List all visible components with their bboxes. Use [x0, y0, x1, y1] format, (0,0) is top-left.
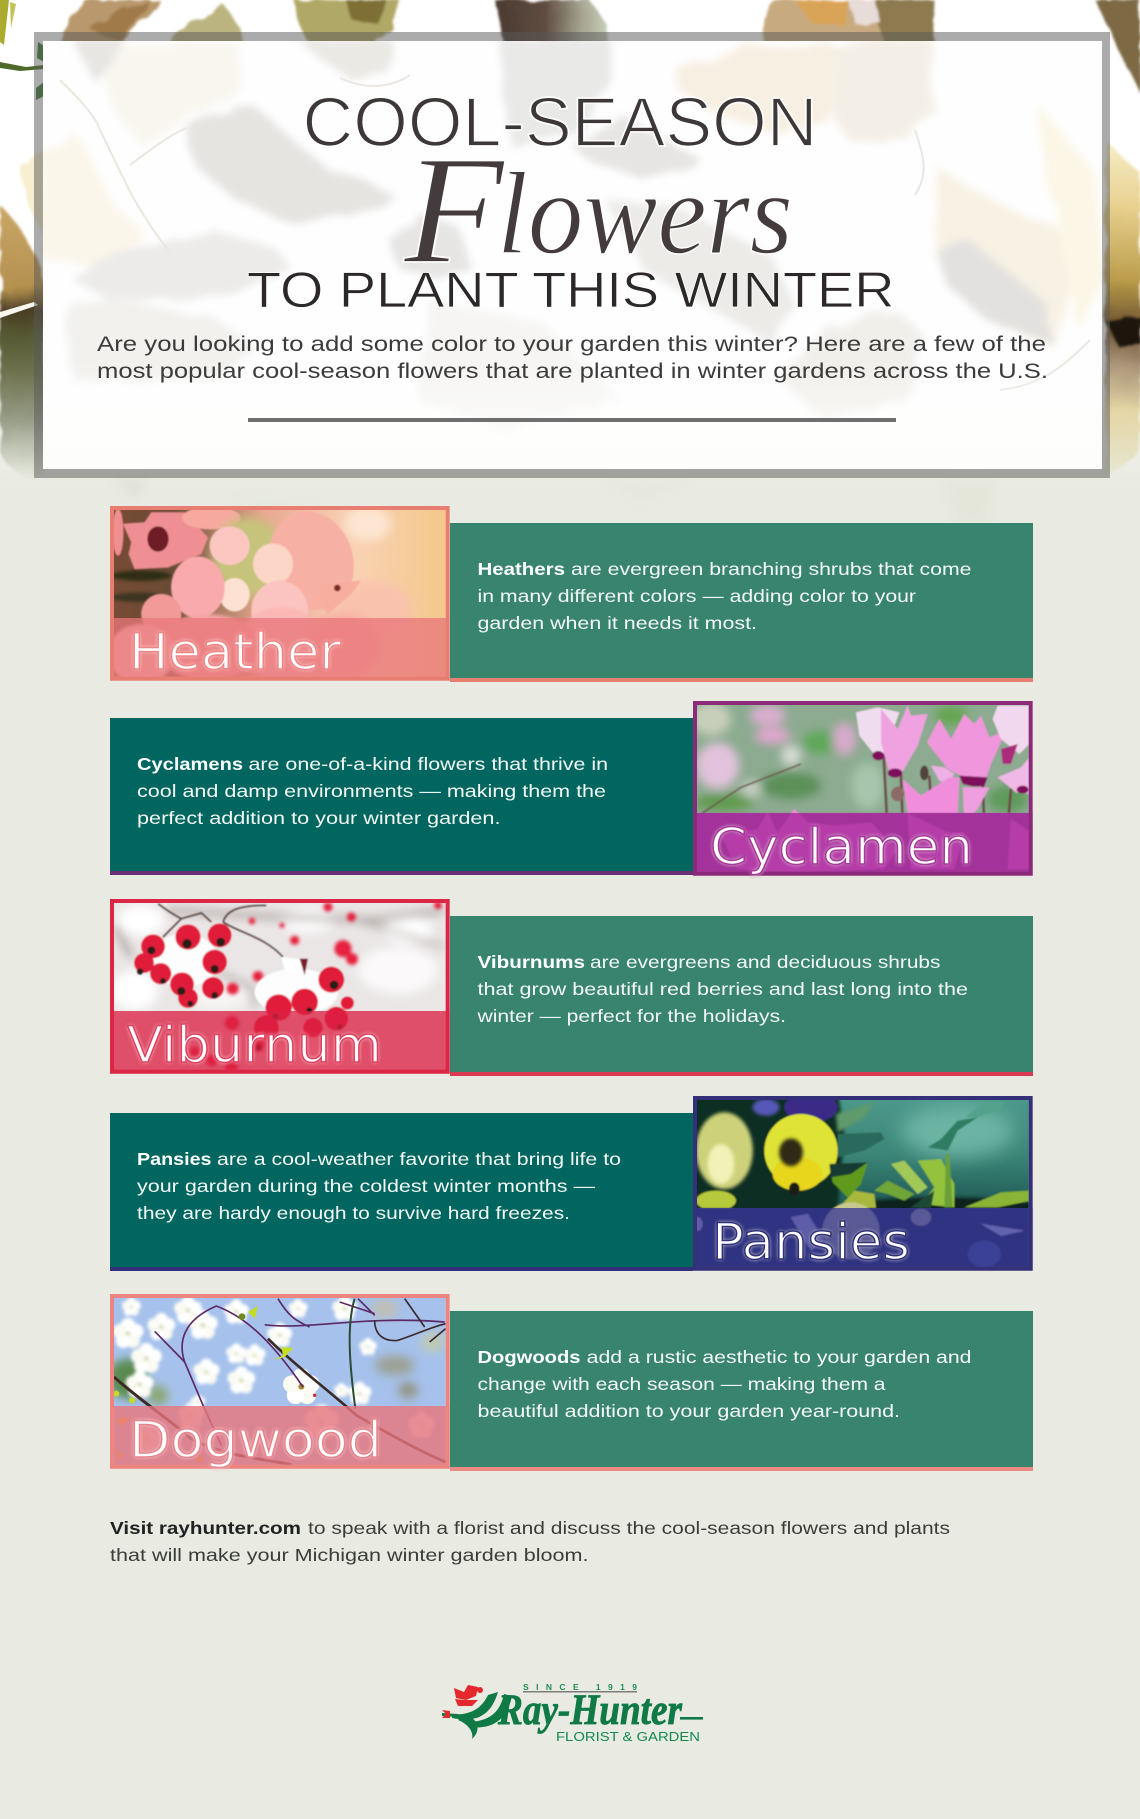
panel: viburnum text: are evergreens and deciduous shrubs — [590, 952, 941, 972]
header frame — [34, 32, 1110, 478]
logo since text: SINCE 1919 — [523, 1682, 637, 1692]
panel: dogwood text — [450, 1311, 1033, 1471]
panel: heather text: garden when it needs it most. — [478, 613, 757, 633]
title: cool-season: COOL-SEASON — [302, 83, 818, 161]
panel bottom fade — [43, 360, 1102, 469]
panel: heather text: are evergreen branching shrubs that come — [571, 559, 972, 579]
photo: cyclamen — [693, 701, 1033, 876]
title: flowers script: lowers — [497, 148, 793, 279]
faint ghost petals below the frame — [110, 478, 995, 530]
panel: dogwood text: add a rustic aesthetic to your garden and — [587, 1347, 972, 1367]
label: cyclamen: Cyclamen — [710, 818, 973, 876]
logo wordmark: Ray-Hunter — [497, 1687, 683, 1734]
photo: heather — [110, 506, 450, 681]
top-left leaf and stem — [0, 0, 44, 100]
panel: dogwood text: Dogwoods — [478, 1347, 581, 1367]
panel: viburnum text — [450, 916, 1033, 1076]
panel: viburnum text: Viburnums — [478, 952, 585, 972]
logo tagline: FLORIST & GARDEN — [556, 1730, 700, 1744]
logo: ray hunter — [442, 1682, 703, 1744]
label: heather: Heather — [129, 623, 341, 681]
label: viburnum: Viburnum — [127, 1016, 382, 1074]
logo icon: flower and leaves — [442, 1685, 512, 1739]
panel: pansies text: are a cool-weather favorite that bring life to — [217, 1149, 621, 1169]
left flower — [0, 205, 46, 478]
panel: heather text: Heathers — [478, 559, 565, 579]
panel: pansies text: your garden during the coldest winter months — — [137, 1176, 596, 1196]
intro text — [97, 333, 1048, 383]
header divider — [248, 418, 896, 422]
ghost branches — [60, 75, 1090, 390]
panel: viburnum text: that grow beautiful red berries and last long into the — [478, 979, 968, 999]
panel: heather text — [450, 523, 1033, 682]
title: to plant this winter: TO PLANT THIS WINTER — [247, 262, 894, 318]
panel: dogwood text: beautiful addition to your garden year-round. — [478, 1401, 900, 1421]
watercolor floral background — [0, 0, 1140, 530]
photo: dogwood — [108, 1296, 450, 1469]
header panel with ghost watercolor — [40, 38, 1105, 469]
title: flowers script — [403, 124, 793, 296]
photo: pansies — [693, 1096, 1033, 1271]
panel: cyclamen text: perfect addition to your winter garden. — [137, 808, 500, 828]
intro text: most popular cool-season flowers that are planted in winter gardens across the U.S. — [97, 360, 1048, 383]
label: dogwood: Dogwood — [129, 1411, 382, 1469]
label: pansies: Pansies — [712, 1213, 910, 1271]
panel: pansies text: Pansies — [137, 1149, 212, 1169]
closing text: to speak with a florist and discuss the cool-season flowers and plants — [308, 1518, 950, 1538]
closing text — [110, 1518, 950, 1565]
closing text: that will make your Michigan winter garden bloom. — [110, 1545, 588, 1565]
panel: cyclamen text: are one-of-a-kind flowers that thrive in — [248, 754, 608, 774]
title: flowers script: F — [403, 124, 505, 296]
top-right branch — [1095, 0, 1140, 93]
closing text: Visit rayhunter.com — [110, 1518, 301, 1538]
panel: pansies text: they are hardy enough to survive hard freezes. — [137, 1203, 570, 1223]
panel: pansies text — [110, 1113, 693, 1271]
panel: cyclamen text — [110, 718, 693, 875]
panel: cyclamen text: cool and damp environments — making them the — [137, 781, 606, 801]
right flower — [1106, 140, 1140, 480]
intro text: Are you looking to add some color to your garden this winter? Here are a few of the — [97, 333, 1046, 356]
panel: dogwood text: change with each season — making them a — [478, 1374, 886, 1394]
photo: viburnum — [110, 899, 450, 1074]
panel: cyclamen text: Cyclamens — [137, 754, 243, 774]
panel: heather text: in many different colors — adding color to your — [478, 586, 916, 606]
panel: viburnum text: winter — perfect for the holidays. — [476, 1006, 786, 1026]
